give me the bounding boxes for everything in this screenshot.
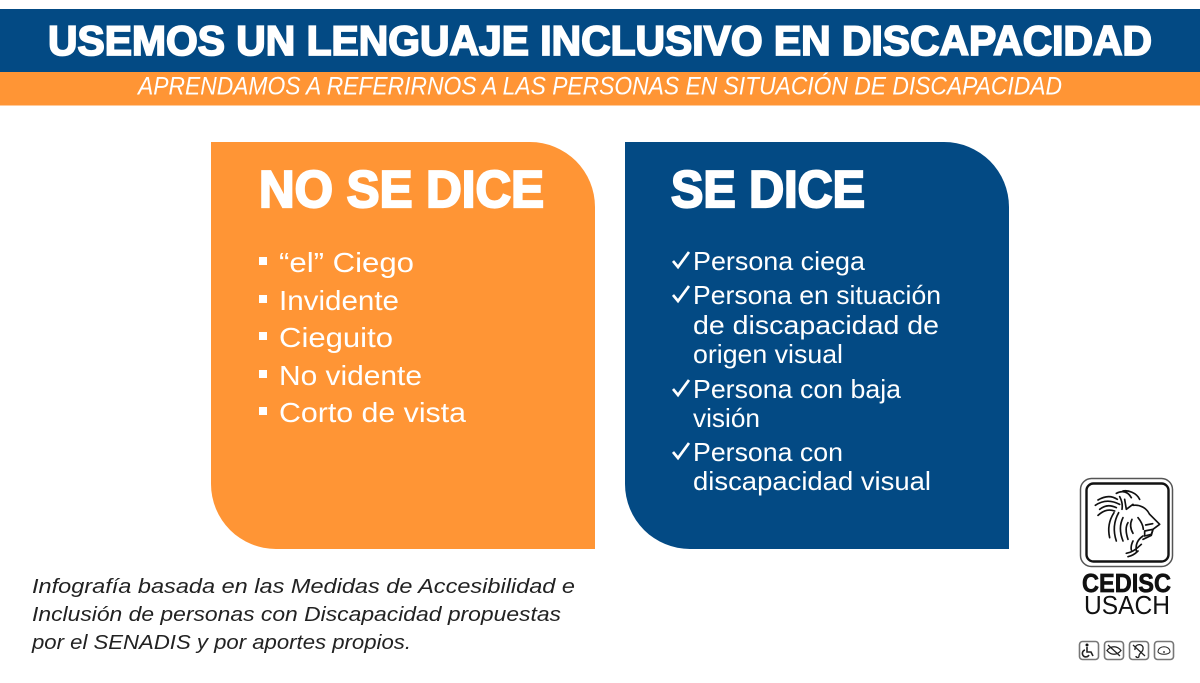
list: correct terms: de discapacidad de [693, 310, 939, 340]
icon: crossed ear [1130, 642, 1148, 660]
logo text: usach: USACH [1084, 590, 1170, 620]
header banner [0, 9, 1200, 72]
source note: Inclusión de personas con Discapacidad propuestas [32, 603, 561, 626]
list: correct terms [673, 246, 941, 496]
list: incorrect terms: Invidente [279, 285, 399, 316]
source note [31, 575, 575, 654]
subtitle banner [0, 72, 1200, 106]
list: correct terms: origen visual [693, 339, 843, 369]
list: correct terms: Persona con [693, 437, 843, 467]
panel: se dice [625, 142, 1009, 549]
logo: cedisc usach [1080, 478, 1172, 620]
list: correct terms: Persona con baja [693, 374, 902, 404]
list: incorrect terms: Cieguito [279, 322, 393, 353]
source note: Infografía basada en las Medidas de Accesibilidad e [32, 575, 575, 598]
heading: se dice: SE DICE [671, 161, 865, 219]
list: incorrect terms: Corto de vista [279, 397, 466, 428]
list: incorrect terms [259, 247, 466, 428]
list: incorrect terms: “el” Ciego [279, 247, 414, 278]
list: correct terms: Persona en situación [693, 280, 941, 310]
logo text: cedisc: CEDISC [1082, 568, 1171, 598]
icon: head [1154, 642, 1174, 660]
heading: no se dice: NO SE DICE [259, 161, 544, 219]
list: incorrect terms: No vidente [279, 360, 422, 391]
list: correct terms: Persona ciega [693, 246, 866, 276]
list: correct terms: discapacidad visual [693, 466, 931, 496]
panel: no se dice [211, 142, 595, 549]
icon: wheelchair [1080, 642, 1098, 660]
icon: lion emblem [1080, 478, 1172, 566]
list: correct terms: visión [693, 403, 760, 433]
accessibility icons [1080, 642, 1174, 660]
title: USEMOS UN LENGUAJE INCLUSIVO EN DISCAPACIDAD [48, 17, 1152, 64]
source note: por el SENADIS y por aportes propios. [31, 631, 411, 654]
subtitle: APRENDAMOS A REFERIRNOS A LAS PERSONAS EN SITUACIÓN DE DISCAPACIDAD [136, 72, 1062, 100]
icon: crossed eye [1104, 642, 1124, 660]
